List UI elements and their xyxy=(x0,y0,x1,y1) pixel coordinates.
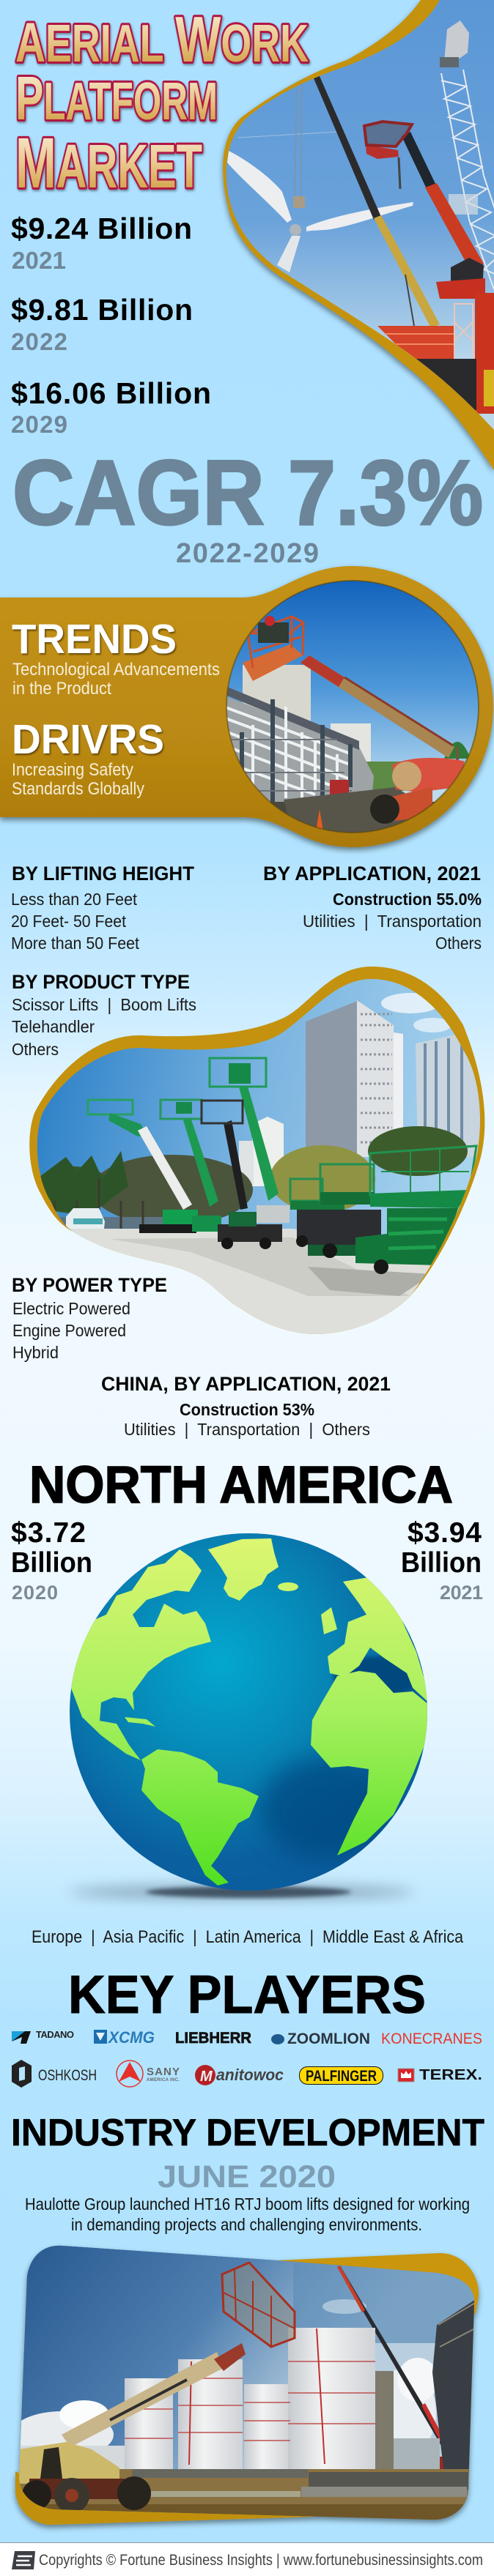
block: by lifting height xyxy=(11,863,194,953)
boom xyxy=(301,655,454,758)
logo: Liebherr: LIEBHERR xyxy=(175,2030,251,2047)
value: North America 2020 xyxy=(11,1517,92,1604)
boom lift 3 xyxy=(210,1058,266,1087)
block: by product type: Others xyxy=(12,1040,59,1059)
block: china by application: Utilities | Transportation | Others xyxy=(124,1420,370,1439)
heading: key players: KEY PLAYERS xyxy=(68,1965,426,2025)
truck boom xyxy=(402,132,435,187)
title line: Market: MARKET xyxy=(15,123,202,203)
logo: Sany xyxy=(117,2061,180,2087)
value 2022: 2022 xyxy=(11,328,67,355)
photo panel: boom lift at storage tanks xyxy=(11,2241,484,2525)
block: by power type: Engine Powered xyxy=(12,1321,126,1340)
logo: Palfinger: PALFINGER xyxy=(306,2068,377,2085)
boom lift 2 xyxy=(161,1100,202,1119)
ground xyxy=(69,1229,438,1334)
logo: Terex xyxy=(398,2067,482,2083)
icon: globe xyxy=(70,1533,440,1899)
block: by lifting height: 20 Feet- 50 Feet xyxy=(11,912,127,931)
block: by power type: Electric Powered xyxy=(12,1299,130,1318)
block: by lifting height: More than 50 Feet xyxy=(11,934,140,953)
block: by lifting height: Less than 20 Feet xyxy=(11,890,138,909)
logo: Manitowoc: M xyxy=(200,2069,213,2085)
date: June 2020: JUNE 2020 xyxy=(158,2159,336,2195)
scaffold tank xyxy=(432,2299,476,2475)
text: development description xyxy=(25,2195,470,2234)
basket xyxy=(222,2263,295,2347)
value 2022 xyxy=(11,293,193,355)
heading: North America: NORTH AMERICA xyxy=(29,1456,453,1514)
truck xyxy=(451,258,484,281)
block: by product type: BY PRODUCT TYPE xyxy=(12,971,190,993)
logo: Konecranes: KONECRANES xyxy=(381,2030,482,2047)
logo: Sany: AMERICA INC. xyxy=(147,2078,180,2082)
trees xyxy=(101,1155,253,1218)
heading: drivers: DRIVRS xyxy=(12,716,164,763)
tower xyxy=(441,70,494,289)
text: trends detail xyxy=(12,660,220,699)
logo: Terex: TEREX. xyxy=(419,2067,482,2083)
ground xyxy=(19,2469,469,2520)
logo: Tadano: TADANO xyxy=(36,2029,74,2040)
block: by application 2021: Construction 55.0% xyxy=(333,890,482,909)
title line: Platform: PLATFORM xyxy=(15,64,218,133)
block: by lifting height: BY LIFTING HEIGHT xyxy=(12,863,194,885)
value: North America 2020: Billion xyxy=(11,1547,92,1579)
text: development description: in demanding projects and challenging environments. xyxy=(71,2215,422,2234)
value 2022: $9.81 Billion xyxy=(11,293,193,327)
value: North America 2020: 2020 xyxy=(12,1582,58,1604)
value: North America 2020: $3.72 xyxy=(11,1517,86,1549)
block: by application 2021: Others xyxy=(435,934,482,953)
value 2029 xyxy=(11,376,211,438)
title line: Aerial Work: AERIAL WORK xyxy=(15,3,309,75)
block: by product type: Scissor Lifts | Boom Lifts xyxy=(12,995,196,1014)
icon: Fortune Business Insights logo xyxy=(12,2551,35,2569)
rotor blades xyxy=(227,151,292,223)
pipes xyxy=(226,697,374,802)
land: Europe xyxy=(328,1577,432,1706)
van xyxy=(66,1208,105,1229)
text: drivers detail: Standards Globally xyxy=(12,779,144,799)
land: Africa xyxy=(311,1671,440,1855)
logo: Manitowoc: anitowoc xyxy=(216,2066,284,2084)
text: drivers detail xyxy=(12,760,144,799)
title xyxy=(15,3,309,203)
block: china by application: CHINA, BY APPLICATION, 2021 xyxy=(101,1373,391,1395)
heading: industry development: INDUSTRY DEVELOPMENT xyxy=(11,2112,484,2154)
scissor lifts xyxy=(290,1179,322,1201)
logos: key players xyxy=(12,2028,482,2088)
value: North America 2021: $3.94 xyxy=(408,1517,482,1549)
block: by application 2021: Utilities | Transportation xyxy=(303,912,482,931)
value 2029: $16.06 Billion xyxy=(11,376,211,410)
land: Caribbean xyxy=(125,1717,155,1727)
logo: Tadano xyxy=(12,2029,74,2044)
logo: Zoomlion: ZOOMLION xyxy=(287,2030,370,2047)
block: china by application xyxy=(101,1373,391,1439)
panel: trends and drivers banner xyxy=(0,566,493,847)
value: North America 2021: Billion xyxy=(401,1547,482,1579)
text: trends detail: Technological Advancements xyxy=(12,660,220,680)
tower buildings xyxy=(306,1000,359,1157)
text: drivers detail: Increasing Safety xyxy=(12,760,133,780)
footer xyxy=(0,2542,494,2576)
chassis xyxy=(19,2442,119,2484)
photo panel: boom and scissor lifts in front of towers xyxy=(29,967,494,1340)
heading: trends: TRENDS xyxy=(12,616,177,663)
yellow and black crane xyxy=(314,76,381,220)
land: British Isles xyxy=(321,1607,337,1634)
logo: XCMG: XCMG xyxy=(107,2028,155,2047)
crane xyxy=(337,2266,441,2445)
block: by power type xyxy=(12,1274,167,1362)
value 2021: $9.24 Billion xyxy=(11,212,192,245)
land: Greenland xyxy=(208,1538,279,1601)
utility cart xyxy=(218,1224,282,1242)
machine xyxy=(392,758,465,792)
logo: Manitowoc xyxy=(195,2065,284,2085)
basket xyxy=(366,145,399,159)
value 2029: 2029 xyxy=(11,411,67,438)
value: North America 2021 xyxy=(401,1517,483,1604)
block: by power type: BY POWER TYPE xyxy=(12,1274,167,1296)
header photo: crane and wind turbine in gold curved frame xyxy=(213,0,494,470)
block: by power type: Hybrid xyxy=(12,1343,59,1362)
block: by product type: Telehandler xyxy=(12,1017,95,1036)
text: trends detail: in the Product xyxy=(12,679,111,699)
value 2021: 2021 xyxy=(12,247,66,274)
tanks xyxy=(375,2371,394,2469)
logo: Sany: SANY xyxy=(147,2066,180,2078)
platform xyxy=(243,644,303,681)
boom xyxy=(62,2352,224,2447)
market size values xyxy=(11,212,211,438)
logo: Oshkosh xyxy=(12,2060,97,2088)
land: South America xyxy=(141,1749,259,1886)
photo: boom lift at refinery xyxy=(220,581,484,838)
CAGR period: 2022-2029 xyxy=(176,538,319,569)
block: by application 2021: BY APPLICATION, 2021 xyxy=(263,863,481,885)
logo: Oshkosh: OSHKOSH xyxy=(38,2067,97,2084)
value 2021 xyxy=(11,212,192,274)
block: by product type xyxy=(12,971,196,1059)
block: by application 2021 xyxy=(263,863,482,953)
land: North and Central America xyxy=(70,1549,211,1760)
block: china by application: Construction 53% xyxy=(180,1400,314,1419)
boom lift 1 xyxy=(88,1100,133,1114)
value: North America 2021: 2021 xyxy=(440,1582,483,1604)
